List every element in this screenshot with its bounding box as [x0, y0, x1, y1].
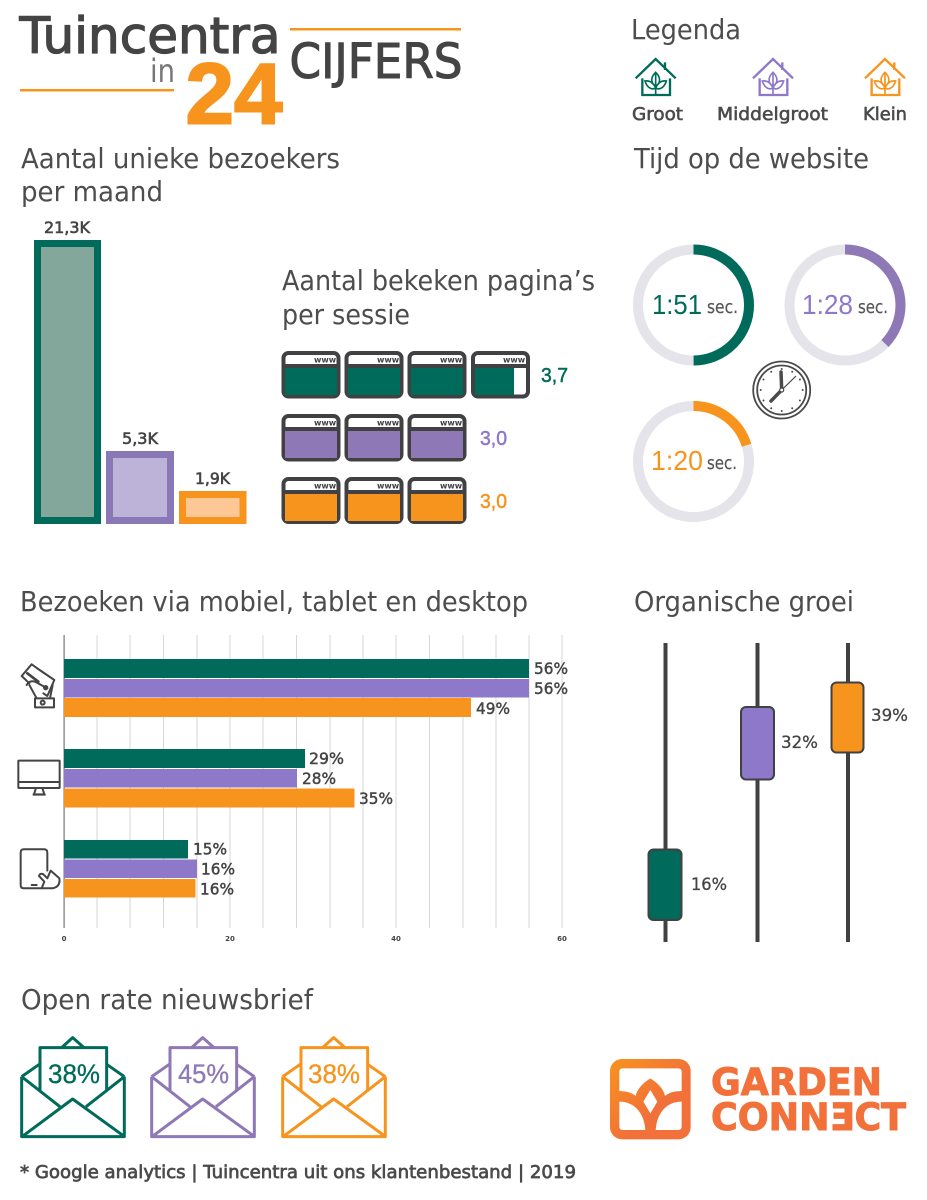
chart axis: [64, 635, 65, 928]
bars: tablet: 16%: [201, 860, 235, 878]
bars: desktop: 35%: [359, 789, 393, 808]
heading: newsletter: Open rate nieuwsbrief: [21, 983, 314, 1016]
bar: groot: [38, 244, 98, 520]
heading: pages: [282, 264, 595, 331]
icon: clock: [753, 362, 810, 418]
bars: mobile: 56%: [534, 679, 568, 698]
browsers: groot: www: [377, 356, 400, 364]
panel: newsletter open rate: [21, 983, 385, 1137]
browsers: groot: www: [314, 356, 337, 364]
legend: Groot: [632, 104, 683, 125]
bar: middelgroot: [110, 454, 170, 520]
icon: house klein: [865, 59, 905, 95]
browsers: groot: www: [440, 356, 463, 364]
panel: devices chart: [18, 585, 568, 943]
axis labels: [62, 935, 567, 943]
heading: visitors: Aantal unieke bezoekers: [21, 142, 340, 175]
legend: Klein: [863, 104, 907, 125]
bar: klein: [182, 494, 243, 520]
donut: groot: sec.: [707, 297, 738, 318]
legend: Legenda: [631, 13, 741, 46]
browsers: klein: www: [314, 482, 337, 490]
bars: tablet: 15%: [193, 840, 227, 858]
heading: visitors: per maand: [21, 175, 163, 208]
donut: middelgroot: sec.: [858, 297, 888, 318]
axis labels: 40: [391, 935, 401, 943]
candle: middelgroot: [741, 643, 818, 942]
heading: pages: Aantal bekeken pagina’s: [282, 264, 595, 297]
panel: pages per session: [282, 264, 595, 522]
panel: pages per session: 3,0: [480, 428, 507, 450]
title: 24: [186, 46, 283, 142]
bars: mobile: 49%: [476, 699, 510, 718]
browsers: middelgroot: www: [377, 418, 400, 428]
logo: GARDEN: [711, 1061, 882, 1104]
icon: desktop: [18, 761, 60, 795]
title: [18, 7, 463, 142]
envelope: klein: [283, 1038, 385, 1137]
browsers: middelgroot: www: [440, 418, 463, 428]
browsers: groot: www: [503, 356, 526, 364]
heading: time: Tijd op de website: [633, 142, 869, 175]
panel: unique visitors: [21, 142, 340, 520]
icon: tablet: [21, 849, 60, 888]
axis labels: 20: [225, 935, 235, 943]
logo: [610, 1059, 907, 1139]
bars: mobile: 56%: [534, 659, 568, 678]
panel: unique visitors: 21,3K: [44, 218, 90, 237]
panel: time on website: [633, 142, 900, 517]
panel: unique visitors: 5,3K: [122, 429, 159, 448]
browsers: middelgroot: [283, 416, 465, 460]
bars: desktop: 29%: [309, 749, 344, 768]
icon: logo mark: [610, 1059, 691, 1139]
donut: klein: 1:20: [651, 445, 703, 476]
donut: middelgroot: [790, 250, 900, 360]
panel: unique visitors: 1,9K: [195, 469, 230, 488]
title: CIJFERS: [290, 34, 462, 90]
browsers: klein: [283, 479, 465, 522]
icon: mobile: [22, 664, 54, 707]
heading: organic: Organische groei: [634, 585, 854, 618]
heading: pages: per sessie: [282, 298, 410, 331]
footnote: * Google analytics | Tuincentra uit ons klantenbestand | 2019: [20, 1162, 576, 1183]
donut: klein: sec.: [707, 453, 737, 474]
icon: house middelgroot: [753, 59, 793, 95]
donut: middelgroot: 1:28: [802, 289, 853, 320]
envelope: klein: 38%: [308, 1059, 360, 1089]
candle: groot: [648, 643, 727, 942]
envelope: middelgroot: [152, 1038, 254, 1137]
candle: klein: [832, 643, 908, 942]
panel: pages per session: 3,0: [480, 491, 507, 513]
browsers: klein: www: [440, 482, 463, 490]
heading: devices: Bezoeken via mobiel, tablet en desktop: [20, 585, 528, 618]
panel: pages per session: 3,7: [541, 365, 568, 387]
logo: CONNƎCT: [711, 1096, 907, 1139]
bars: tablet: 16%: [200, 880, 234, 898]
legend: [631, 13, 907, 125]
title: Tuincentra: [18, 7, 281, 65]
icon: house groot: [636, 59, 676, 95]
axis labels: 0: [62, 935, 67, 943]
browsers: middelgroot: www: [314, 418, 337, 428]
bars: desktop: 28%: [302, 769, 336, 788]
axis labels: 60: [557, 935, 567, 943]
browsers: groot: [283, 353, 528, 396]
donut: groot: 1:51: [652, 289, 702, 320]
candle: klein: 39%: [871, 706, 908, 726]
title: in: [150, 52, 175, 90]
envelope: groot: [22, 1038, 124, 1137]
donut: groot: [638, 250, 749, 360]
envelope: groot: 38%: [48, 1059, 100, 1089]
heading: visitors: [21, 142, 340, 208]
panel: organic growth: [634, 585, 908, 942]
donut: klein: [638, 406, 749, 517]
bars: tablet: [64, 840, 235, 898]
envelope: middelgroot: 45%: [178, 1059, 229, 1089]
candle: groot: 16%: [691, 875, 727, 895]
browsers: klein: www: [377, 482, 400, 490]
bars: desktop: [64, 749, 393, 808]
candle: middelgroot: 32%: [781, 733, 818, 753]
legend: Middelgroot: [717, 104, 828, 125]
bars: mobile: [64, 659, 568, 718]
